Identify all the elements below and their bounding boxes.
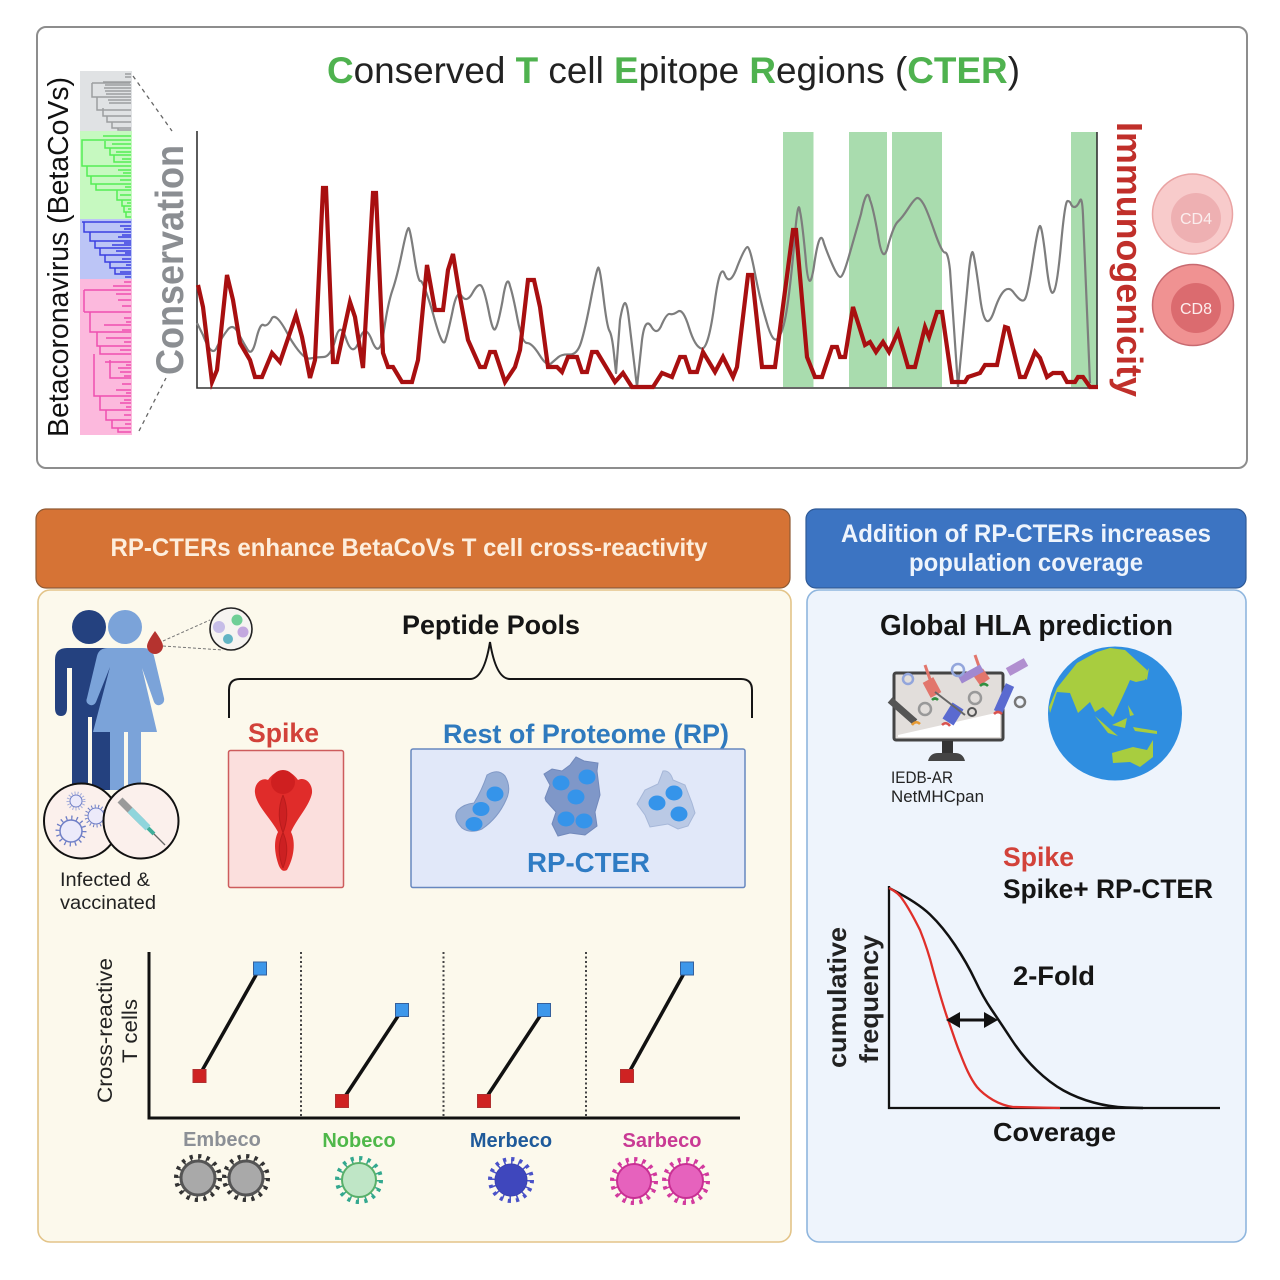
axis label: cumulative frequency [822,927,884,1068]
label: Spike: Spike [248,718,319,748]
box: spike protein [228,750,344,888]
axis label: Betacoronavirus: Betacoronavirus (BetaCoVs) [43,77,75,437]
icon: blood drop and sample [147,608,252,654]
icon: Merbeco virus [490,1159,532,1201]
series: Sarbeco pair [620,962,694,1082]
heading: peptide pools: Peptide Pools [402,610,580,640]
label: Sarbeco: Sarbeco [623,1130,701,1152]
phylogenetic tree [80,71,132,435]
icon: CD8 cell [1152,264,1234,346]
axis title [94,958,142,1103]
caption: infected and vaccinated: vaccinated [60,893,156,914]
caption: prediction tools [891,769,984,806]
icon: Sarbeco viruses [612,1159,708,1203]
series: Embeco pair [193,962,266,1082]
line: immunogenicity [198,188,1098,387]
axis label: Coverage: Coverage [993,1117,1116,1147]
label: Rest of Proteome: Rest of Proteome (RP) [443,719,729,749]
label: Merbeco: Merbeco [470,1130,552,1152]
icon: Embeco viruses [176,1156,268,1200]
series: Merbeco pair [478,1004,550,1108]
label: 2-Fold: 2-Fold [1013,961,1095,991]
label: Embeco: Embeco [183,1129,261,1151]
chart: cross-reactive T cells by subgenus [94,952,740,1118]
line: conservation [197,195,1090,387]
caption: prediction tools: NetMHCpan [891,788,984,806]
icon: protein one [456,772,509,831]
label: Nobeco: Nobeco [322,1130,396,1152]
icon: CD8 cell: CD8 [1180,301,1212,318]
chart: conservation and immunogenicity line plot [197,131,1098,388]
chart: population coverage curves [889,886,1220,1108]
icon: CD4 cell [1152,174,1232,254]
icon: computer monitor with HLA molecules [890,655,1026,761]
axis label: Conservation: Conservation [149,145,192,375]
heading: population coverage banner [806,509,1246,588]
heading: population coverage banner: Addition of RP-CTERs increases [841,520,1211,548]
arrow: fold change [946,1012,998,1028]
caption: infected and vaccinated: Infected & [60,870,150,891]
label: RP-CTER: RP-CTER [527,847,650,878]
legend: Spike [1003,842,1074,872]
box: rest of proteome [411,749,745,888]
axis title: Cross-reactive [94,958,117,1103]
icon: Nobeco virus [337,1158,381,1202]
panel: population coverage [806,509,1246,1242]
series: Nobeco pair [336,1004,408,1108]
icon: protein two [544,757,600,836]
legend [1003,842,1213,904]
bracket [229,642,752,718]
icon: man figure [55,610,112,790]
CTER highlight bands [783,132,1097,387]
axis label: Immunogenicity: Immunogenicity [1109,122,1150,397]
heading: Global HLA prediction: Global HLA prediction [880,610,1173,642]
icon: protein three [637,771,695,829]
heading: cross-reactivity banner: RP-CTERs enhance BetaCoVs T cell cross-reactivity [110,534,708,562]
caption: prediction tools: IEDB-AR [891,769,953,787]
icon: vaccination circle [104,784,178,858]
caption: infected and vaccinated [60,870,156,914]
axis label: cumulative frequency: frequency [854,934,884,1063]
heading: population coverage banner: population coverage [909,549,1143,577]
icon: infection circle [44,784,119,858]
curve: Spike [889,888,1060,1108]
title: Conserved T cell Epitope Regions (CTER) [327,50,1020,91]
panel: conservation and immunogenicity overview [37,27,1247,468]
axis title: T cells [119,999,142,1063]
icon: globe [1048,646,1182,780]
legend: Spike+ RP-CTER [1003,874,1213,904]
heading: cross-reactivity banner [36,509,790,588]
zoom dashes from tree to chart [133,76,172,431]
icon: woman figure [86,610,164,790]
icon: CD4 cell: CD4 [1180,211,1212,228]
axis label: cumulative frequency: cumulative [822,927,852,1068]
curve: Spike plus RP-CTER [889,888,1143,1108]
panel: T cell cross-reactivity [36,509,791,1242]
